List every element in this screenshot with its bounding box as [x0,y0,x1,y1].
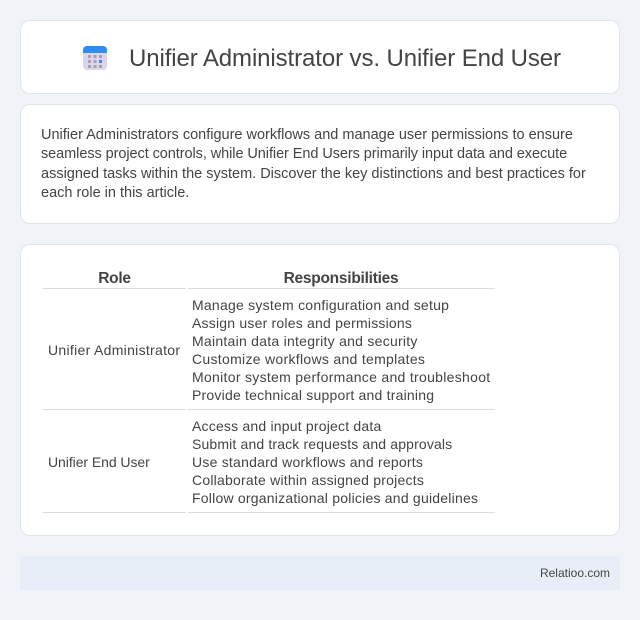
intro text: each role in this article. [41,184,189,200]
intro text: Unifier Administrators configure workflows and manage user permissions to ensure [41,126,573,142]
row label: Unifier End User: Unifier End User [48,454,150,470]
row list: end user responsibilities: Submit and track requests and approvals [192,436,452,452]
table header: Role: Role [98,270,131,287]
panel: comparison table card [20,244,620,536]
table header: Responsibilities: Responsibilities [284,270,398,287]
row label: Unifier Administrator: Unifier Administrator [48,342,180,358]
row list: administrator responsibilities: Maintain data integrity and security [192,333,418,349]
row list: administrator responsibilities: Monitor system performance and troubleshoot [192,369,490,385]
row list: administrator responsibilities: Customize workflows and templates [192,351,425,367]
icon: calendar [83,46,107,70]
row list: end user responsibilities: Access and input project data [192,418,381,434]
row list: end user responsibilities [192,418,478,506]
footer bar [20,556,620,590]
panel: introduction card [20,104,620,224]
footer text: Relatioo.com [540,566,610,580]
row list: end user responsibilities: Use standard workflows and reports [192,454,423,470]
title: Unifier Administrator vs. Unifier End User [129,45,561,72]
panel: title card [20,20,620,94]
row list: end user responsibilities: Collaborate within assigned projects [192,472,424,488]
row list: administrator responsibilities: Assign user roles and permissions [192,315,412,331]
row list: administrator responsibilities: Provide technical support and training [192,387,434,403]
row list: end user responsibilities: Follow organizational policies and guidelines [192,490,478,506]
intro text: assigned tasks within the system. Discover the key distinctions and best practices for [41,166,586,182]
intro text [41,126,586,200]
intro text: seamless project controls, while Unifier End Users primarily input data and execute [41,146,567,162]
row list: administrator responsibilities: Manage system configuration and setup [192,297,449,313]
row list: administrator responsibilities [192,297,490,403]
